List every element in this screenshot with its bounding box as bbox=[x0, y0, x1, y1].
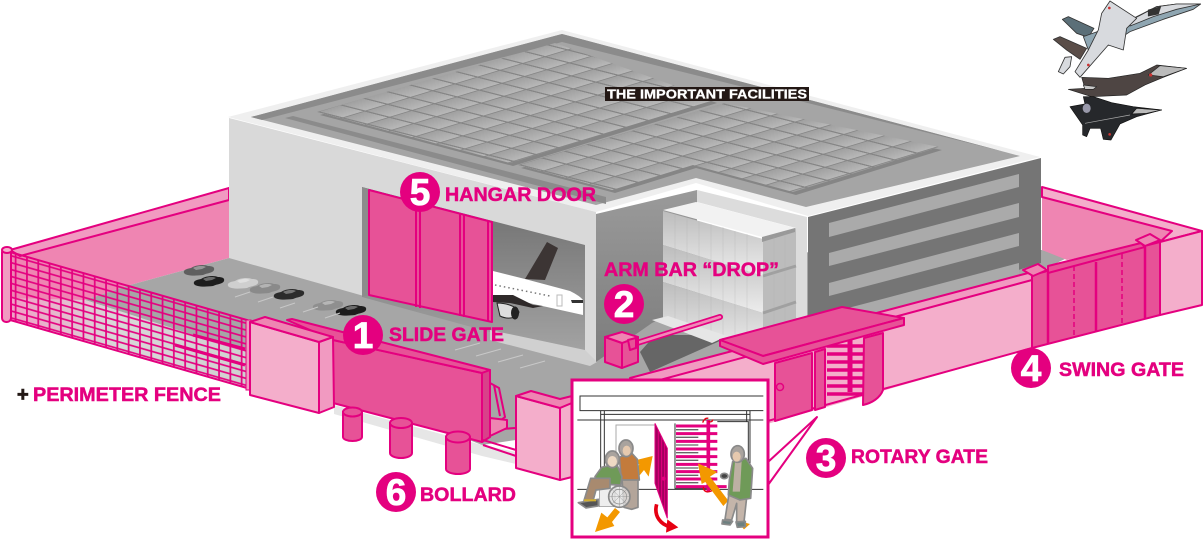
label 4: swing gate bbox=[1011, 348, 1184, 389]
roof bbox=[228, 30, 1040, 216]
bollards bbox=[343, 408, 470, 474]
label 6: bollard: 6 bbox=[386, 472, 406, 513]
inset callout pointer bbox=[768, 417, 817, 485]
label 4: swing gate: SWING GATE bbox=[1059, 359, 1184, 381]
label: perimeter fence: + bbox=[17, 384, 29, 406]
label 6: bollard bbox=[376, 472, 516, 513]
wheelchair user bbox=[578, 451, 630, 508]
label 2: arm bar drop bbox=[604, 259, 779, 325]
fighter jets bbox=[1053, 1, 1201, 140]
slide gate bbox=[250, 317, 516, 456]
rotary gate booth bbox=[720, 307, 904, 421]
arm bar gate bbox=[605, 316, 727, 372]
caption: the important facilities: THE IMPORTANT FACILITIES bbox=[607, 86, 807, 102]
hangar wall bbox=[229, 118, 596, 362]
ground: paved yard bbox=[85, 250, 1067, 445]
right office wall bbox=[808, 158, 1041, 335]
label 1: slide gate: SLIDE GATE bbox=[389, 324, 504, 346]
label 1: slide gate: 1 bbox=[353, 315, 373, 356]
office windows bbox=[829, 174, 1019, 326]
label 4: swing gate: 4 bbox=[1021, 348, 1042, 389]
hangar door bbox=[369, 190, 492, 322]
label 3: rotary gate: 3 bbox=[816, 438, 836, 479]
entrance recess wall bbox=[596, 190, 697, 362]
ground shadow below gate bbox=[334, 405, 516, 464]
label 5: hangar door bbox=[400, 172, 596, 213]
orange arrows bbox=[595, 456, 750, 532]
building bbox=[228, 30, 1041, 366]
concrete block by inset bbox=[516, 391, 572, 480]
label 1: slide gate bbox=[343, 315, 504, 356]
rotary bars bbox=[676, 426, 727, 487]
label 2: arm bar drop: 2 bbox=[614, 284, 634, 325]
gate structure bbox=[577, 396, 763, 489]
solar panels bbox=[320, 46, 717, 166]
label 2: arm bar drop: ARM BAR “DROP” bbox=[604, 259, 779, 281]
perimeter fence mesh bbox=[2, 247, 251, 390]
jet 3 bbox=[1070, 97, 1162, 140]
hangar opening bbox=[362, 187, 585, 358]
label 6: bollard: BOLLARD bbox=[420, 484, 516, 506]
open door leaf bbox=[655, 423, 667, 518]
jet 2 bbox=[1068, 65, 1187, 97]
label 5: hangar door: HANGAR DOOR bbox=[445, 184, 596, 206]
airplane bbox=[493, 242, 583, 320]
label: perimeter fence: PERIMETER FENCE bbox=[33, 384, 221, 406]
fence: left rear wall bbox=[10, 188, 229, 303]
label 3: rotary gate bbox=[806, 438, 988, 479]
label 5: hangar door: 5 bbox=[410, 172, 430, 213]
inset: rotary gate detail bbox=[572, 380, 768, 537]
standing man bbox=[721, 446, 753, 527]
fence: right rear wall bbox=[1042, 187, 1202, 260]
parked cars bbox=[184, 265, 366, 316]
front fence with swing gate bbox=[572, 231, 1202, 480]
glass volume bbox=[663, 190, 807, 350]
person pushing wheelchair bbox=[619, 440, 639, 509]
parking markings bbox=[235, 292, 545, 368]
label 3: rotary gate: ROTARY GATE bbox=[851, 446, 988, 468]
red rotation arrow bbox=[656, 504, 670, 527]
jet 1 bbox=[1053, 1, 1201, 77]
